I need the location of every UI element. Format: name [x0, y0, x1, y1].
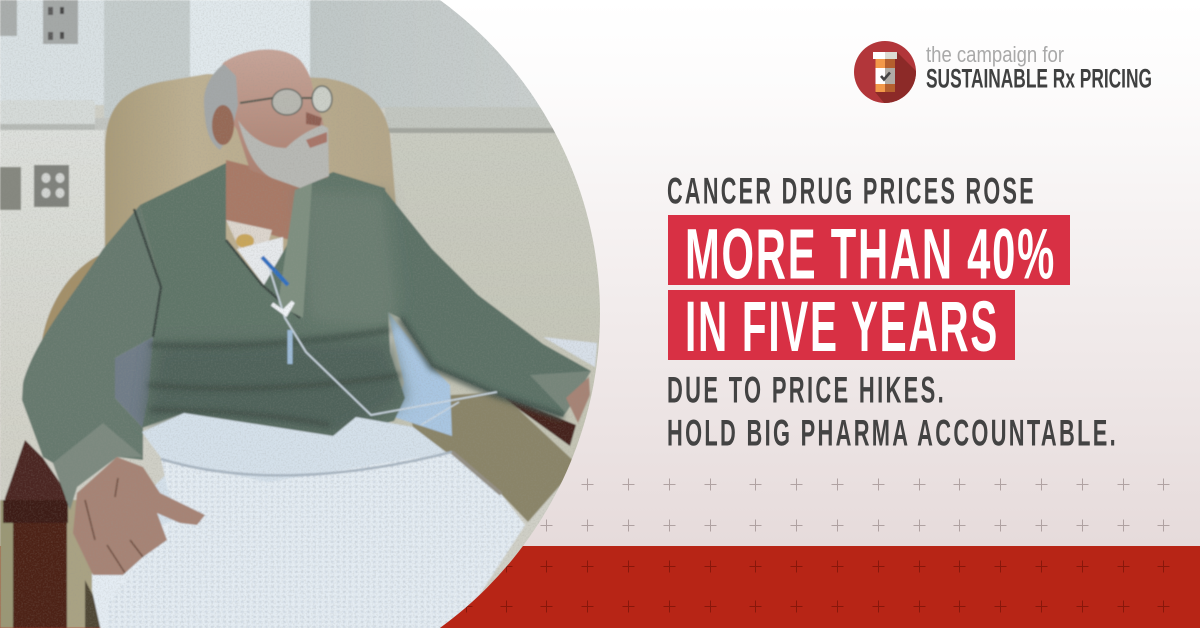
sweater torso: [140, 163, 405, 436]
left sleeve: [21, 205, 161, 464]
logo: the campaign for sustainable rx pricing: [854, 41, 1151, 103]
patient's left hand: [73, 457, 205, 575]
text line: due to price hikes: DUE TO PRICE HIKES.: [667, 368, 946, 410]
logo tagline: the campaign for: [926, 42, 1064, 67]
green sweater: [22, 163, 591, 510]
patient's right hand: [566, 377, 590, 423]
photo grain texture: [0, 0, 600, 628]
neck and chest: [226, 160, 306, 285]
pillows: [115, 312, 597, 436]
patient's head with beard and glasses: [204, 50, 332, 188]
red footer band: [0, 546, 1200, 628]
IV line and connectors: [262, 257, 497, 425]
highlight: in five years: [668, 288, 1015, 367]
plus pattern on background: [460, 478, 1170, 612]
hospital wall: [0, 0, 620, 628]
headline block: [667, 169, 1118, 454]
blanket: [92, 413, 525, 628]
right sleeve: [380, 188, 591, 417]
chair: [0, 74, 578, 628]
circular photo: patient in infusion chair: [0, 0, 620, 628]
logo icon: pill bottle: [854, 41, 916, 103]
